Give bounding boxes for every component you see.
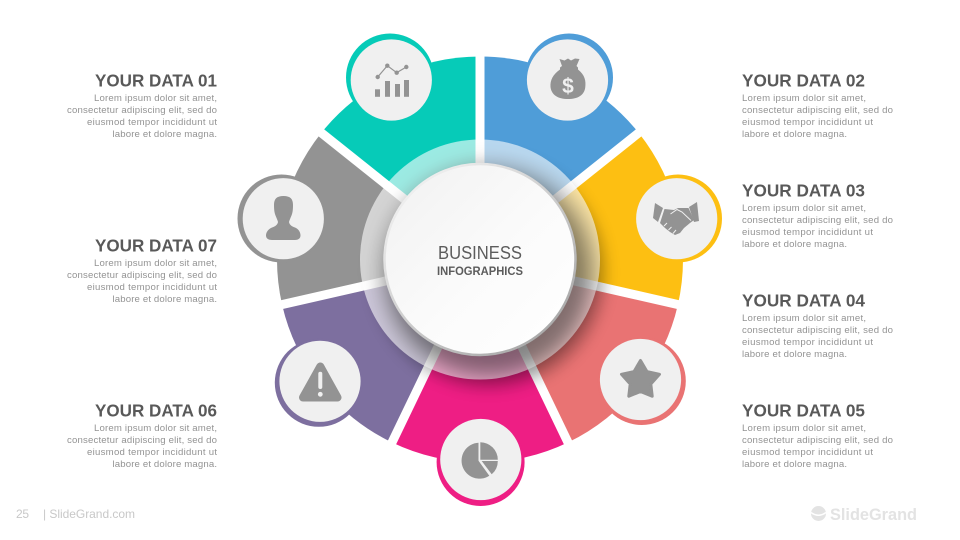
text block 07: Lorem ipsum dolor sit amet, <box>94 258 217 269</box>
text block 01 <box>67 70 217 140</box>
text block 01: Lorem ipsum dolor sit amet, <box>94 93 217 104</box>
badge 05: pie chart <box>437 418 525 506</box>
text block 03: labore et dolore magna. <box>742 239 847 250</box>
badge 04: star <box>598 337 686 425</box>
badge 03: handshake <box>634 174 722 262</box>
segment 02: blue <box>480 56 639 260</box>
text block 07: consectetur adipiscing elit, sed do <box>67 270 217 281</box>
footer page number and site: | SlideGrand.com <box>43 507 135 521</box>
text block 01: consectetur adipiscing elit, sed do <box>67 105 217 116</box>
badge 01: line and bar chart <box>346 34 434 122</box>
translucent ring <box>360 140 600 380</box>
badge 06: warning triangle <box>275 339 363 427</box>
disc shadow <box>387 171 591 375</box>
footer page number and site: 25 <box>16 507 29 521</box>
text block 05 <box>742 400 893 470</box>
text block 04: consectetur adipiscing elit, sed do <box>742 325 893 336</box>
badge 07: person <box>238 174 326 262</box>
footer logo: SlideGrand <box>830 505 917 524</box>
text block 03: eiusmod tempor incididunt ut <box>742 227 873 238</box>
text block 04: Lorem ipsum dolor sit amet, <box>742 313 866 324</box>
center disc <box>384 164 576 355</box>
text block 06: YOUR DATA 06 <box>95 400 217 420</box>
segment 05: magenta <box>392 260 568 463</box>
text block 02: Lorem ipsum dolor sit amet, <box>742 93 866 104</box>
text block 03: Lorem ipsum dolor sit amet, <box>742 203 866 214</box>
text block 05: YOUR DATA 05 <box>742 400 865 420</box>
segment 03: yellow <box>480 133 683 305</box>
text block 06 <box>67 400 217 470</box>
text block 06: labore et dolore magna. <box>112 459 217 470</box>
text block 01: eiusmod tempor incididunt ut <box>87 117 217 128</box>
badge 02: money bag: $ <box>562 75 574 98</box>
badge 02: money bag <box>525 34 613 122</box>
segment 06: purple <box>282 260 480 442</box>
text block 02: consectetur adipiscing elit, sed do <box>742 105 893 116</box>
text block 07 <box>67 236 217 305</box>
segment 01: teal <box>321 56 480 260</box>
text block 02: YOUR DATA 02 <box>742 70 865 90</box>
segment 07: gray <box>277 133 480 305</box>
text block 04: YOUR DATA 04 <box>742 290 865 310</box>
text block 04: eiusmod tempor incididunt ut <box>742 337 873 348</box>
text block 07: eiusmod tempor incididunt ut <box>87 282 217 293</box>
center title: BUSINESS <box>438 243 522 263</box>
text block 07: YOUR DATA 07 <box>95 236 217 256</box>
text block 03: YOUR DATA 03 <box>742 180 865 200</box>
text block 04 <box>742 290 893 360</box>
text block 02: eiusmod tempor incididunt ut <box>742 117 873 128</box>
text block 05: consectetur adipiscing elit, sed do <box>742 435 893 446</box>
segment 04: coral <box>480 260 678 442</box>
text block 05: Lorem ipsum dolor sit amet, <box>742 423 866 434</box>
text block 01: YOUR DATA 01 <box>95 70 217 90</box>
text block 02: labore et dolore magna. <box>742 129 847 140</box>
radial wheel <box>267 40 693 463</box>
text block 02 <box>742 70 893 140</box>
text block 06: Lorem ipsum dolor sit amet, <box>94 423 217 434</box>
text block 06: eiusmod tempor incididunt ut <box>87 447 217 458</box>
segment gaps <box>267 40 693 457</box>
text block 01: labore et dolore magna. <box>112 129 217 140</box>
text block 05: labore et dolore magna. <box>742 459 847 470</box>
text block 06: consectetur adipiscing elit, sed do <box>67 435 217 446</box>
text block 03 <box>742 180 893 250</box>
text block 03: consectetur adipiscing elit, sed do <box>742 215 893 226</box>
ring outer shadow <box>373 156 605 388</box>
text block 07: labore et dolore magna. <box>112 294 217 305</box>
center title <box>437 243 523 278</box>
text block 05: eiusmod tempor incididunt ut <box>742 447 873 458</box>
center title: INFOGRAPHICS <box>437 264 523 278</box>
text block 04: labore et dolore magna. <box>742 349 847 360</box>
